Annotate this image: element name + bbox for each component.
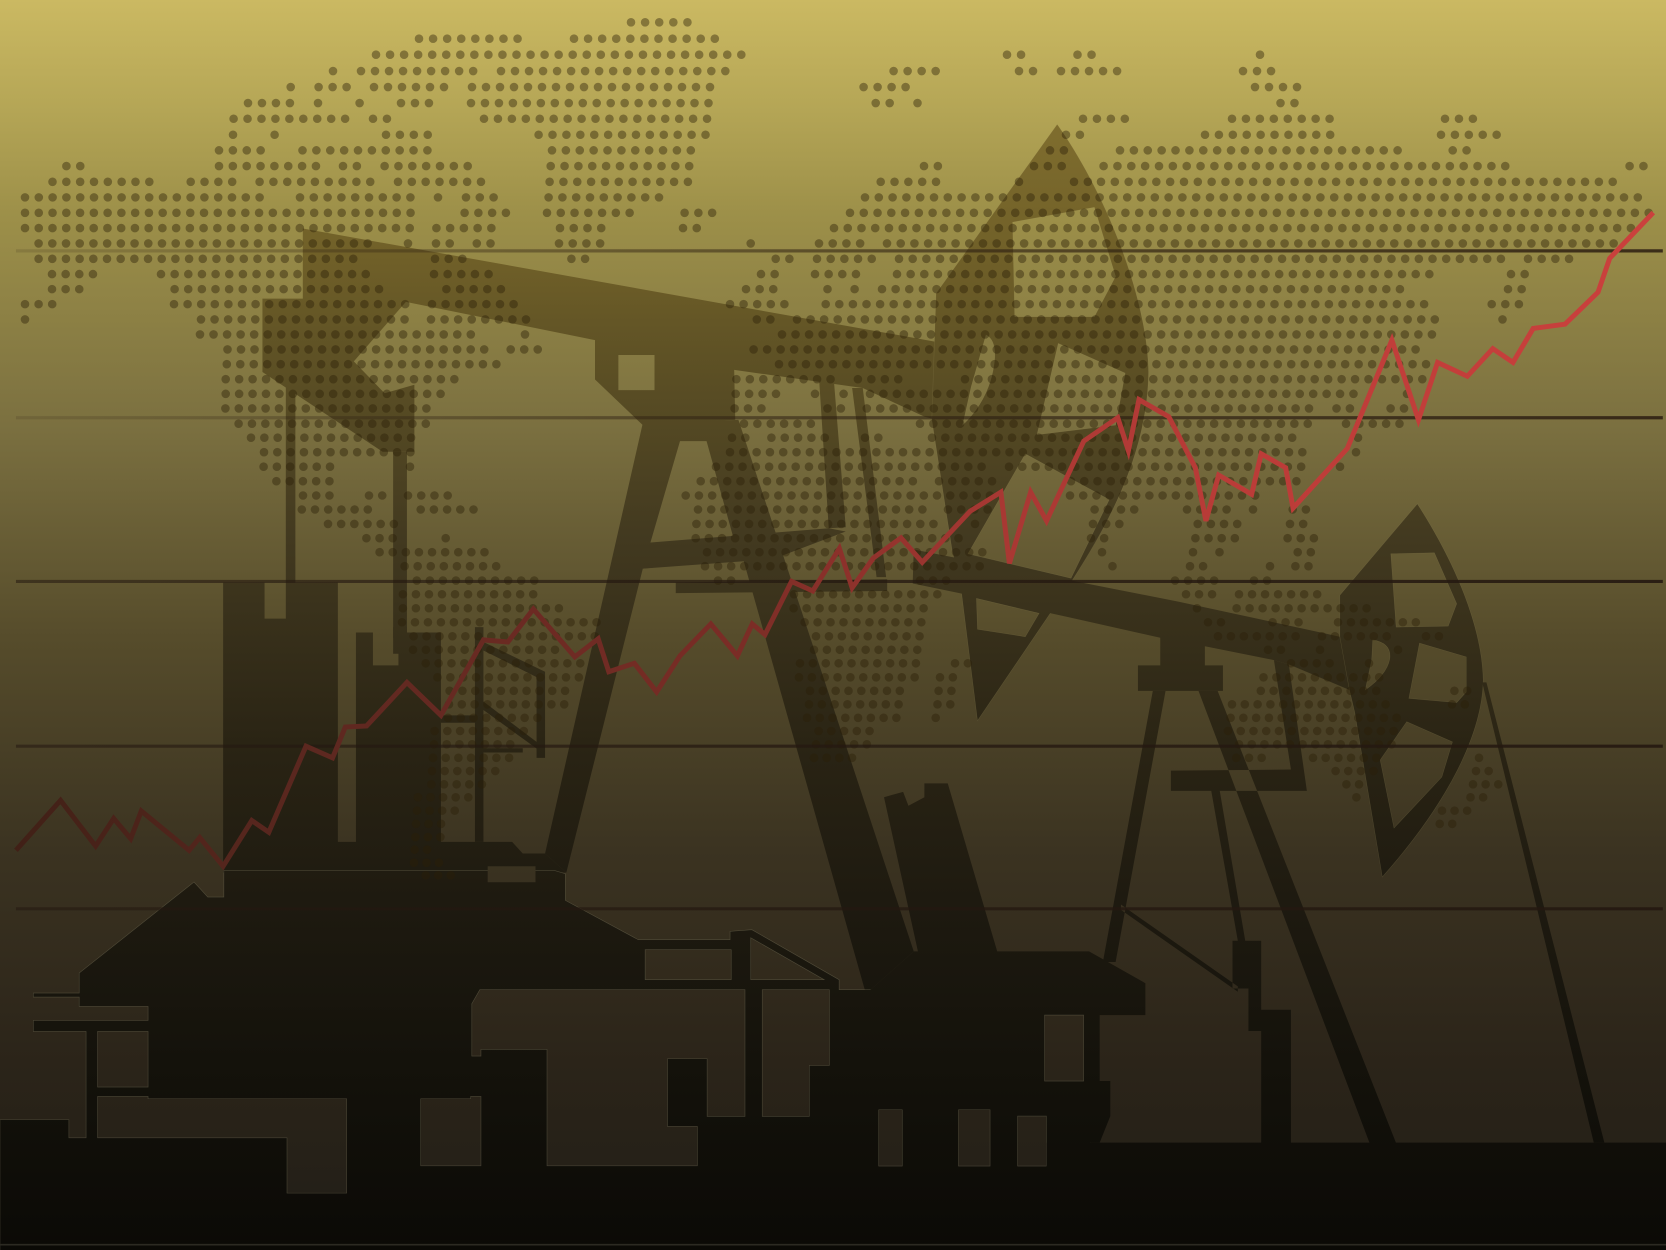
derrick lattice — [441, 627, 545, 842]
A-frame — [545, 420, 914, 994]
rising red price line — [16, 213, 1653, 866]
dotted world map — [25, 22, 1661, 875]
small inset panel in tower base — [488, 866, 536, 882]
horsehead — [932, 124, 1149, 721]
left tower and derrick — [223, 383, 566, 873]
walking beam and counterweight — [262, 229, 956, 452]
horizontal chart grid lines — [0, 251, 1666, 1245]
pitman rods — [643, 381, 887, 593]
gearbox post — [884, 783, 999, 957]
ground strip right — [1047, 1143, 1666, 1250]
small walking beam — [913, 550, 1365, 696]
small horsehead — [1340, 504, 1483, 877]
vertical rods — [286, 383, 407, 638]
machinery base and ground, left — [0, 870, 1091, 1250]
large pump jack — [262, 124, 1149, 994]
machinery block, right — [829, 951, 1666, 1250]
small pump jack — [913, 504, 1604, 1146]
small jack legs, rods and gearbox — [1103, 660, 1604, 1146]
engine housing — [829, 951, 1145, 1143]
tower block — [223, 582, 566, 873]
